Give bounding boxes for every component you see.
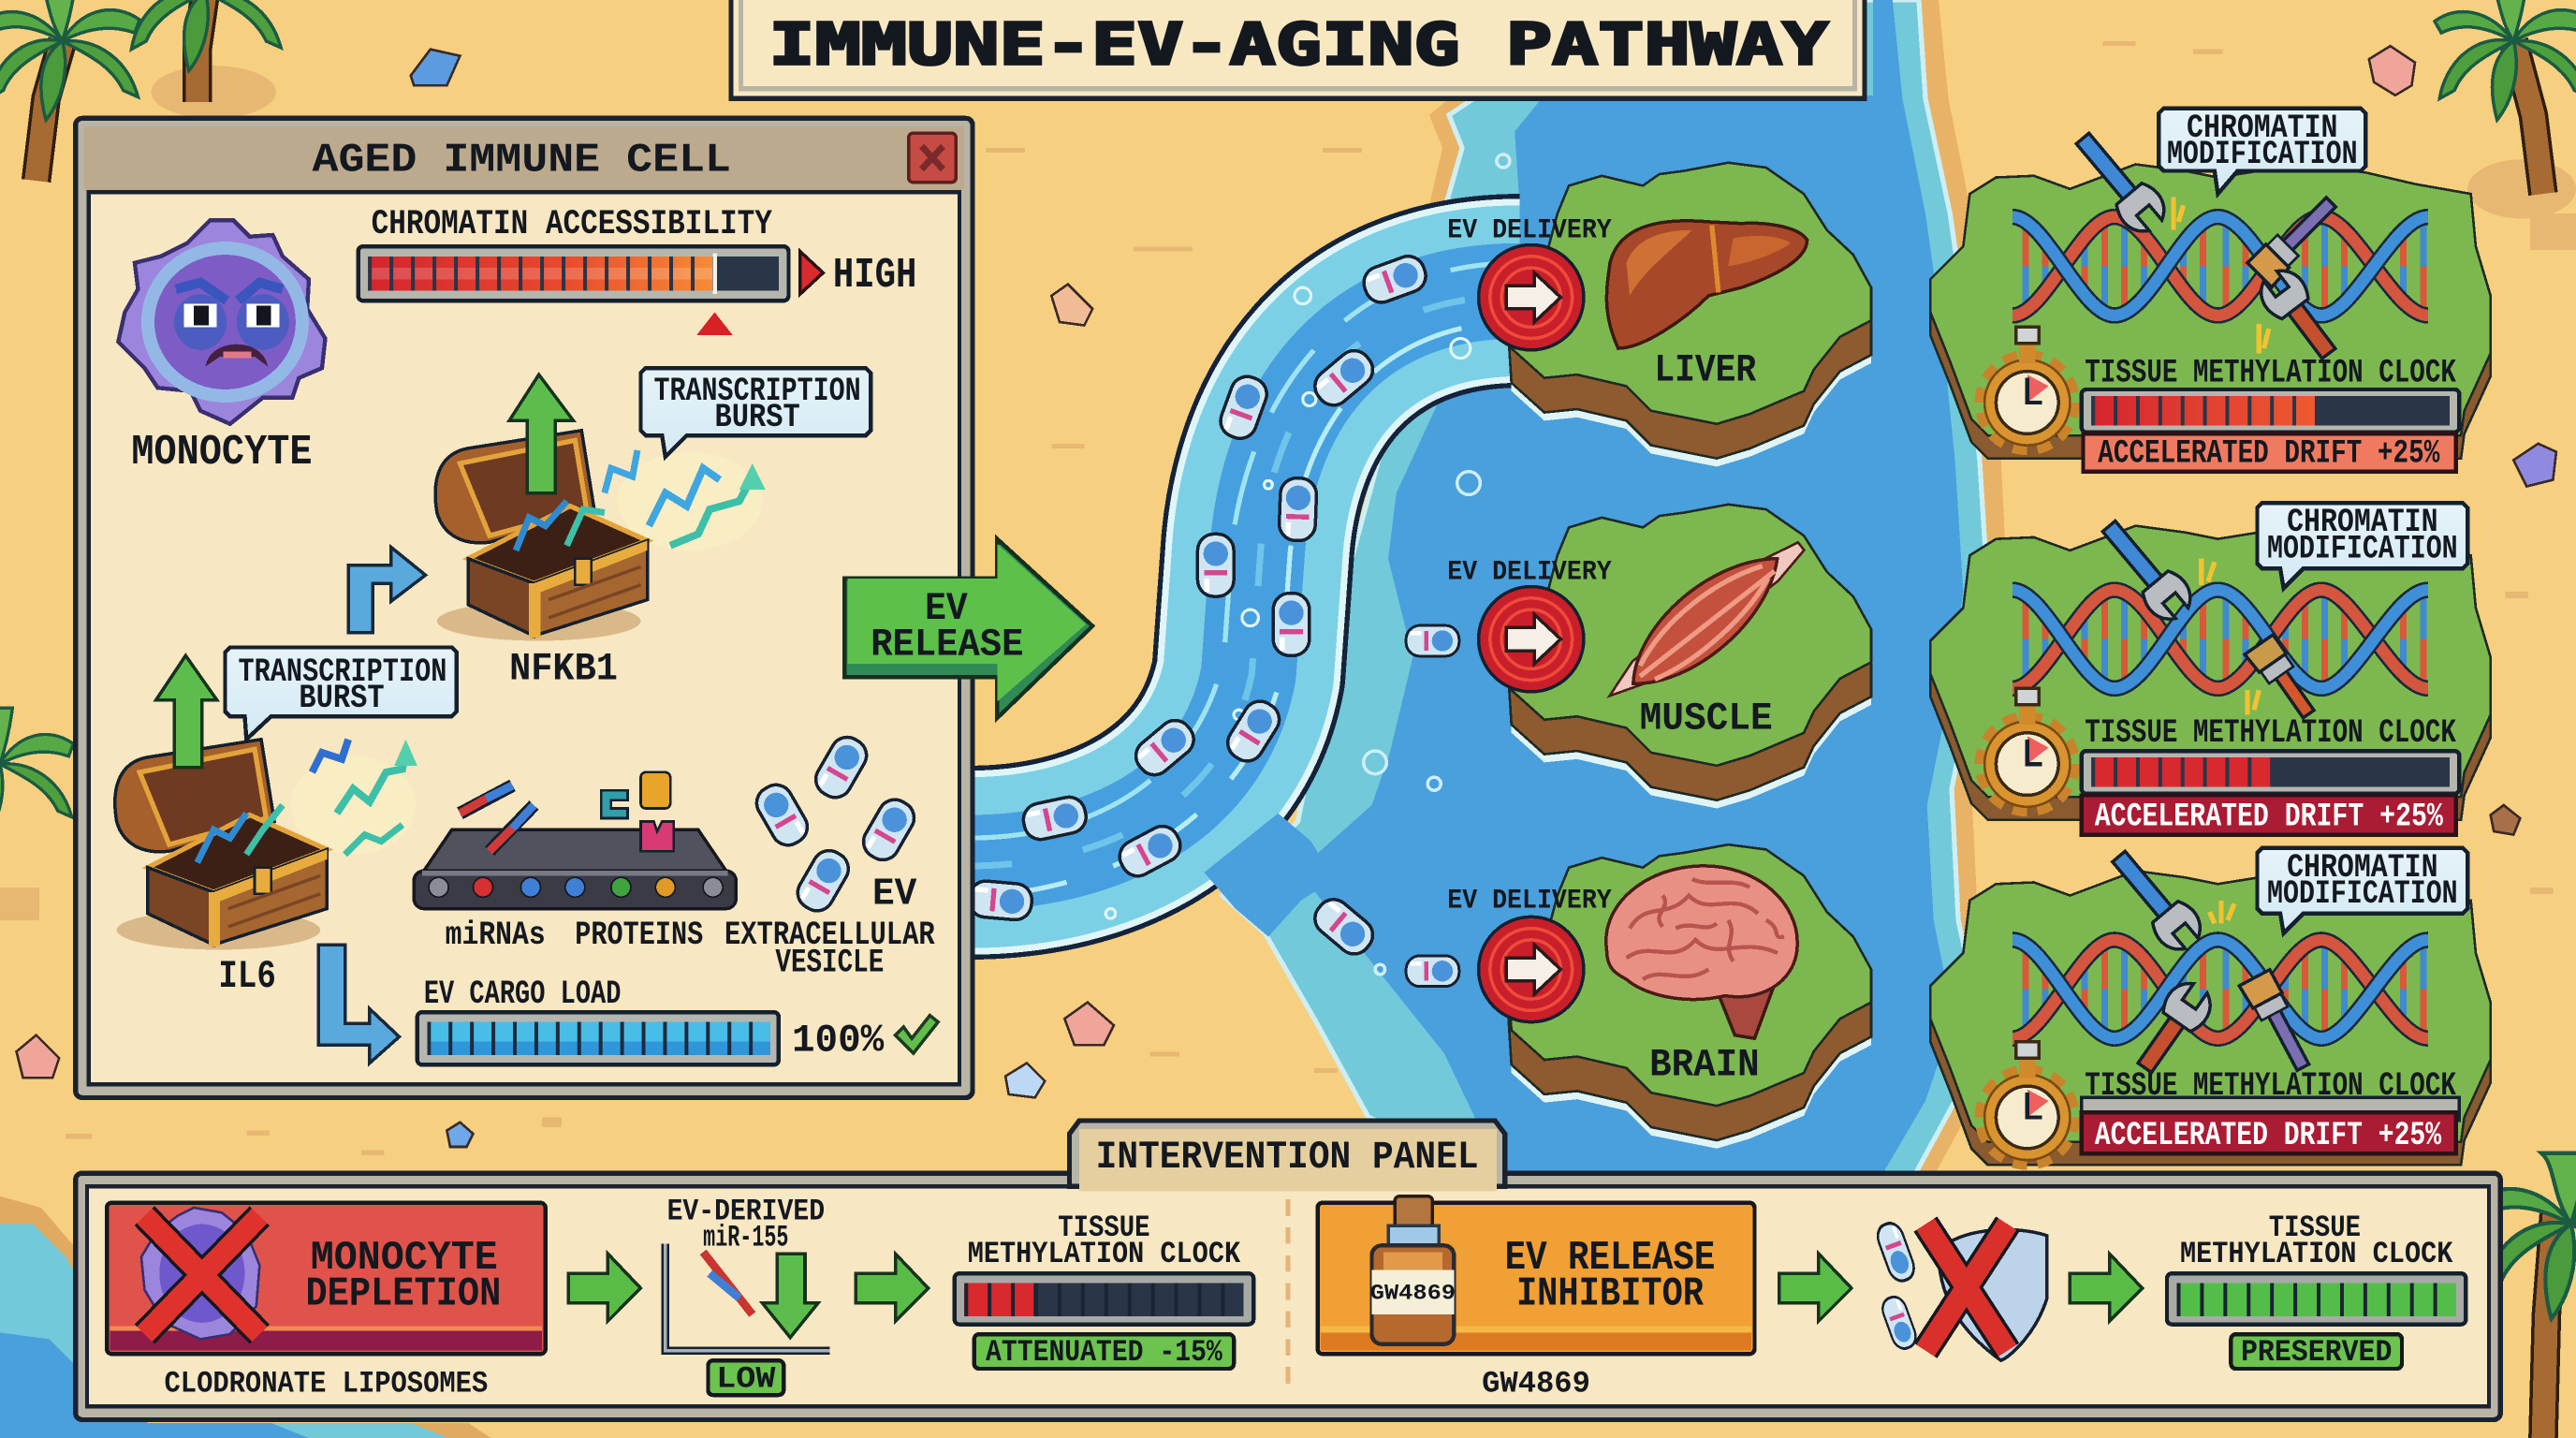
chromatin bubble: MODIFICATION [2167,136,2358,173]
GW4869 bottle [1370,1196,1456,1344]
GW4869 bottle: GW4869 [1370,1281,1456,1305]
brain organ [1606,866,1797,1038]
monocyte depletion card: DEPLETION [305,1271,501,1318]
methylation clock label: METHYLATION CLOCK [2180,1237,2453,1271]
methylation bar frame [2082,1097,2459,1121]
drift badge: ACCELERATED DRIFT +25% [2098,435,2440,473]
proteins label: PROTEINS [575,917,703,954]
target: liver delivery [1477,243,1586,352]
clock icon [1984,688,2070,807]
check mark [896,1016,938,1053]
EV release inhibitor card: INHIBITOR [1516,1271,1705,1318]
cargo conveyor [414,772,736,909]
monocyte depletion card: MONOCYTE [311,1235,498,1282]
river: EV stream [970,263,1519,896]
chromatin bubble: CHROMATIN [2287,849,2438,887]
panel: muscle chromatin and clock [1930,503,2491,835]
methylation bar: preserved [2167,1273,2466,1325]
miRNAs label: miRNAs [446,917,546,954]
shells and pebbles [17,46,2556,1147]
divider [1286,1199,1289,1393]
island: liver [1477,163,1871,466]
target: muscle delivery [1477,585,1586,694]
EV delivery label: muscle: EV DELIVERY [1447,556,1612,588]
drift badge: ACCELERATED DRIFT +25% [2095,1117,2442,1154]
panel: aged immune cell [76,118,973,1097]
attenuated badge: ATTENUATED -15% [986,1335,1222,1370]
methylation clock label: TISSUE [2269,1211,2361,1245]
tools [2092,512,2322,725]
clock icon [1984,1042,2070,1160]
drift badge: ACCELERATED DRIFT +25% [2095,798,2444,835]
EV cargo bar [417,1012,779,1064]
panel: interventions [76,1121,2500,1419]
methylation bar [2082,389,2459,433]
shallow water [1222,0,1988,1177]
panel: brain chromatin and clock [1930,843,2491,1165]
tools [2066,125,2347,367]
IL6 transcription bubble [225,648,457,740]
preserved badge: PRESERVED [2241,1335,2392,1370]
panel title bar [84,126,964,191]
clodronate label: CLODRONATE LIPOSOMES [165,1367,488,1401]
clock label: TISSUE METHYLATION CLOCK [2085,1067,2457,1105]
crossed monocyte [141,1208,259,1339]
methylation bar [2082,751,2459,794]
chromatin bubble: MODIFICATION [2267,875,2458,913]
panel: liver chromatin and clock [1930,109,2491,473]
EV release arrow: RELEASE [871,622,1023,667]
100 percent label: 100% [792,1018,885,1063]
liver organ [1606,221,1808,348]
island: brain [1477,844,1871,1149]
island: muscle [1477,505,1871,809]
wet sand edge [1222,0,2008,1177]
chromatin bubble: CHROMATIN [2287,504,2438,541]
chromatin bubble: CHROMATIN [2187,110,2338,147]
chromatin bubble: MODIFICATION [2267,530,2458,567]
IL6 transcription bubble: BURST [299,680,385,717]
NFKB1 transcription bubble: TRANSCRIPTION [654,373,861,410]
panel tab [1070,1121,1505,1191]
sand details [0,41,2576,1155]
EV release arrow: EV [925,586,968,631]
chromatin accessibility label: CHROMATIN ACCESSIBILITY [372,205,773,244]
NFKB1 label: NFKB1 [509,647,618,692]
methylation bar: attenuated [955,1273,1253,1325]
EV-derived miR-155 label: miR-155 [703,1220,788,1255]
sparkles [2174,198,2269,353]
methylation clock label [2180,1211,2453,1271]
miR-155 mini chart [666,1244,829,1351]
bottom-left water [0,1196,493,1438]
extracellular vesicles [751,731,920,917]
elbow arrow to cargo bar [318,945,399,1064]
arrow [568,1254,640,1321]
extracellular vesicle label: EXTRACELLULAR [724,917,935,954]
tools [2102,843,2318,1080]
close button [909,133,956,183]
chromatin accessibility bar [359,246,788,301]
EV cargo load label: EV CARGO LOAD [424,976,621,1013]
panel tab: INTERVENTION PANEL [1096,1135,1479,1180]
chromatin bubble [2159,109,2365,194]
panel title: AGED IMMUNE CELL [312,138,731,184]
level marker [696,312,733,335]
arrow [856,1254,929,1321]
deep water [1298,0,1963,1177]
extracellular vesicle label [724,917,935,982]
clock icon [1984,327,2070,446]
arrow [2070,1254,2143,1321]
muscle organ [1589,521,1821,720]
title banner [731,0,1865,98]
IL6 up arrow [156,655,217,768]
clock label: TISSUE METHYLATION CLOCK [2085,355,2457,392]
EV vesicles in river [968,252,1459,987]
IL6 chest [115,740,417,949]
river bubbles [1105,287,1471,918]
liver label: LIVER [1654,347,1757,392]
bubbles in sea [1364,154,1510,975]
monocyte icon [118,220,326,424]
EV release inhibitor card [1318,1196,1754,1354]
high label: HIGH [833,251,916,300]
down arrow [762,1254,818,1338]
title banner: IMMUNE-EV-AGING PATHWAY [768,11,1828,78]
low badge: LOW [716,1361,776,1396]
methylation clock label: TISSUE [1058,1211,1150,1245]
blocked vesicle release icon [1874,1220,2047,1360]
monocyte label: MONOCYTE [131,428,312,477]
EV release arrow [844,539,1092,718]
EV delivery label: liver: EV DELIVERY [1447,214,1612,246]
monocyte depletion card [107,1203,546,1354]
methylation clock label [968,1211,1241,1271]
clock label: TISSUE METHYLATION CLOCK [2085,714,2457,752]
NFKB1 transcription bubble [640,368,871,457]
EV release inhibitor card: EV RELEASE [1505,1235,1715,1282]
high arrow [800,252,823,294]
DNA helix [2012,217,2428,315]
EV-derived miR-155 label: EV-DERIVED [667,1194,825,1228]
chromatin bubble [2258,848,2467,933]
sparkles [2210,901,2234,923]
muscle label: MUSCLE [1640,696,1773,741]
DNA helix [2012,590,2428,688]
EV-derived miR-155 label [667,1194,825,1255]
EV delivery label: brain: EV DELIVERY [1447,885,1612,917]
river mouth [1204,814,1334,936]
sparkles [2202,559,2259,714]
EV label: EV [872,873,917,916]
DNA helix [2012,940,2428,1038]
NFKB1 up arrow [509,374,574,493]
chromatin bubble [2258,503,2467,588]
extracellular vesicle label: VESICLE [775,945,884,982]
GW4869 label: GW4869 [1482,1367,1590,1401]
NFKB1 chest [435,431,766,640]
NFKB1 transcription bubble: BURST [714,399,800,436]
IL6 transcription bubble: TRANSCRIPTION [238,653,446,691]
panel body [89,192,959,1084]
methylation clock label: METHYLATION CLOCK [968,1237,1241,1271]
IL6 label: IL6 [218,954,276,999]
arrow [1779,1254,1852,1321]
brain label: BRAIN [1649,1043,1760,1088]
target: brain delivery [1477,916,1586,1023]
elbow arrow to NFKB1 [348,547,426,633]
